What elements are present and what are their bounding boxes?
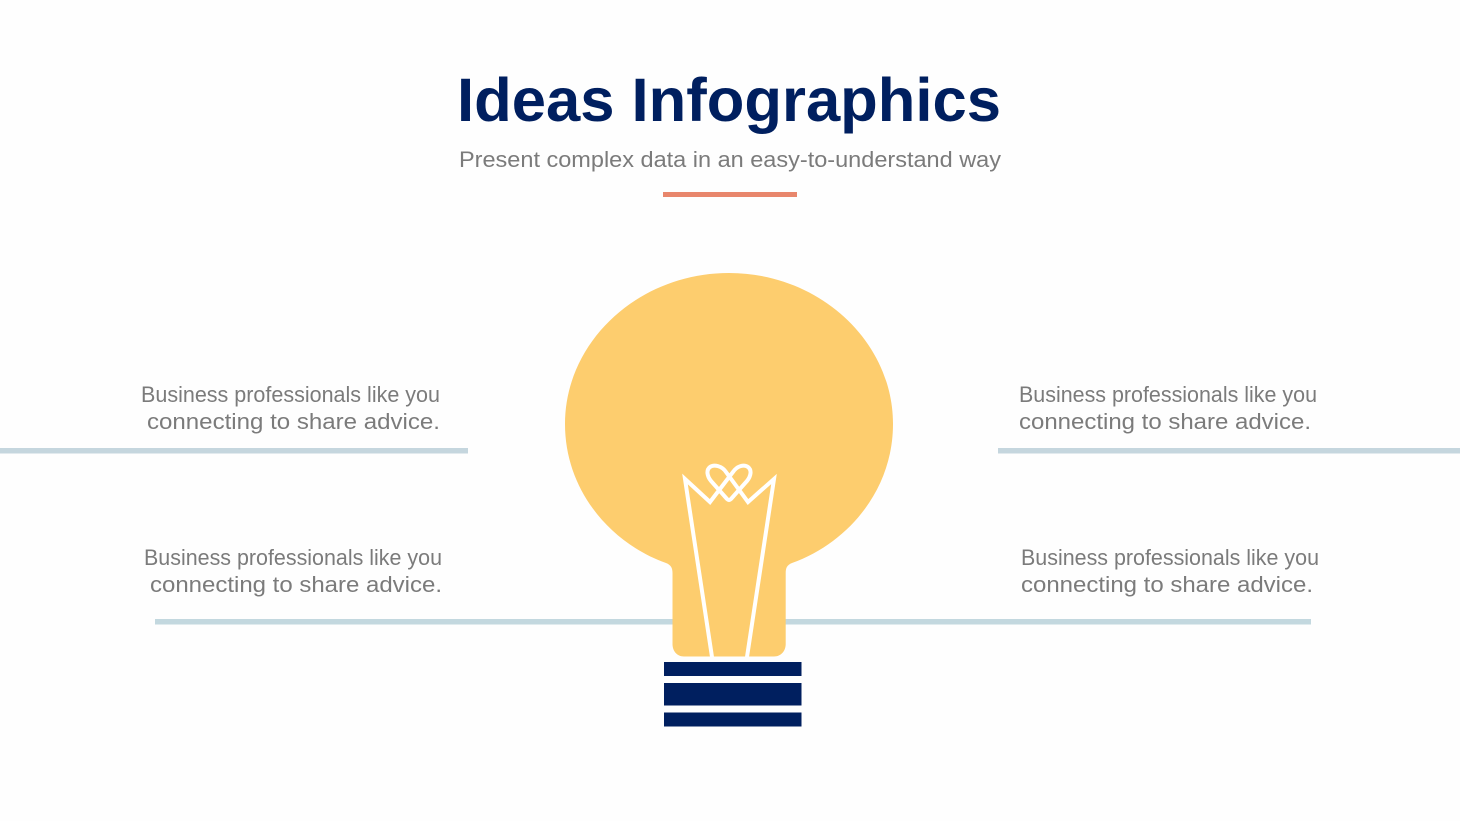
filament	[685, 466, 774, 657]
text block: upper right	[1019, 382, 1317, 434]
text block: lower right	[1021, 545, 1319, 597]
text block: lower left: connecting to share advice.	[150, 572, 442, 597]
title: Ideas Infographics	[457, 66, 1001, 134]
text block: lower right: connecting to share advice.	[1021, 572, 1313, 597]
text block: upper right: connecting to share advice.	[1019, 409, 1311, 434]
text block: lower left: Business professionals like you	[144, 545, 442, 570]
text block: upper left	[141, 382, 440, 434]
text block: upper right: Business professionals like you	[1019, 382, 1317, 407]
subtitle: Present complex data in an easy-to-understand way	[459, 147, 1002, 172]
text block: upper left: Business professionals like you	[141, 382, 440, 407]
text block: lower left	[144, 545, 442, 597]
text block: lower right: Business professionals like you	[1021, 545, 1319, 570]
connector line: lower	[155, 619, 1311, 624]
screw base	[664, 662, 802, 726]
connector line: upper right	[998, 448, 1460, 454]
accent underline	[663, 192, 797, 197]
connector line: upper left	[0, 448, 468, 454]
bulb glass	[565, 273, 893, 656]
text block: upper left: connecting to share advice.	[147, 409, 440, 434]
icon: light bulb	[565, 273, 893, 726]
